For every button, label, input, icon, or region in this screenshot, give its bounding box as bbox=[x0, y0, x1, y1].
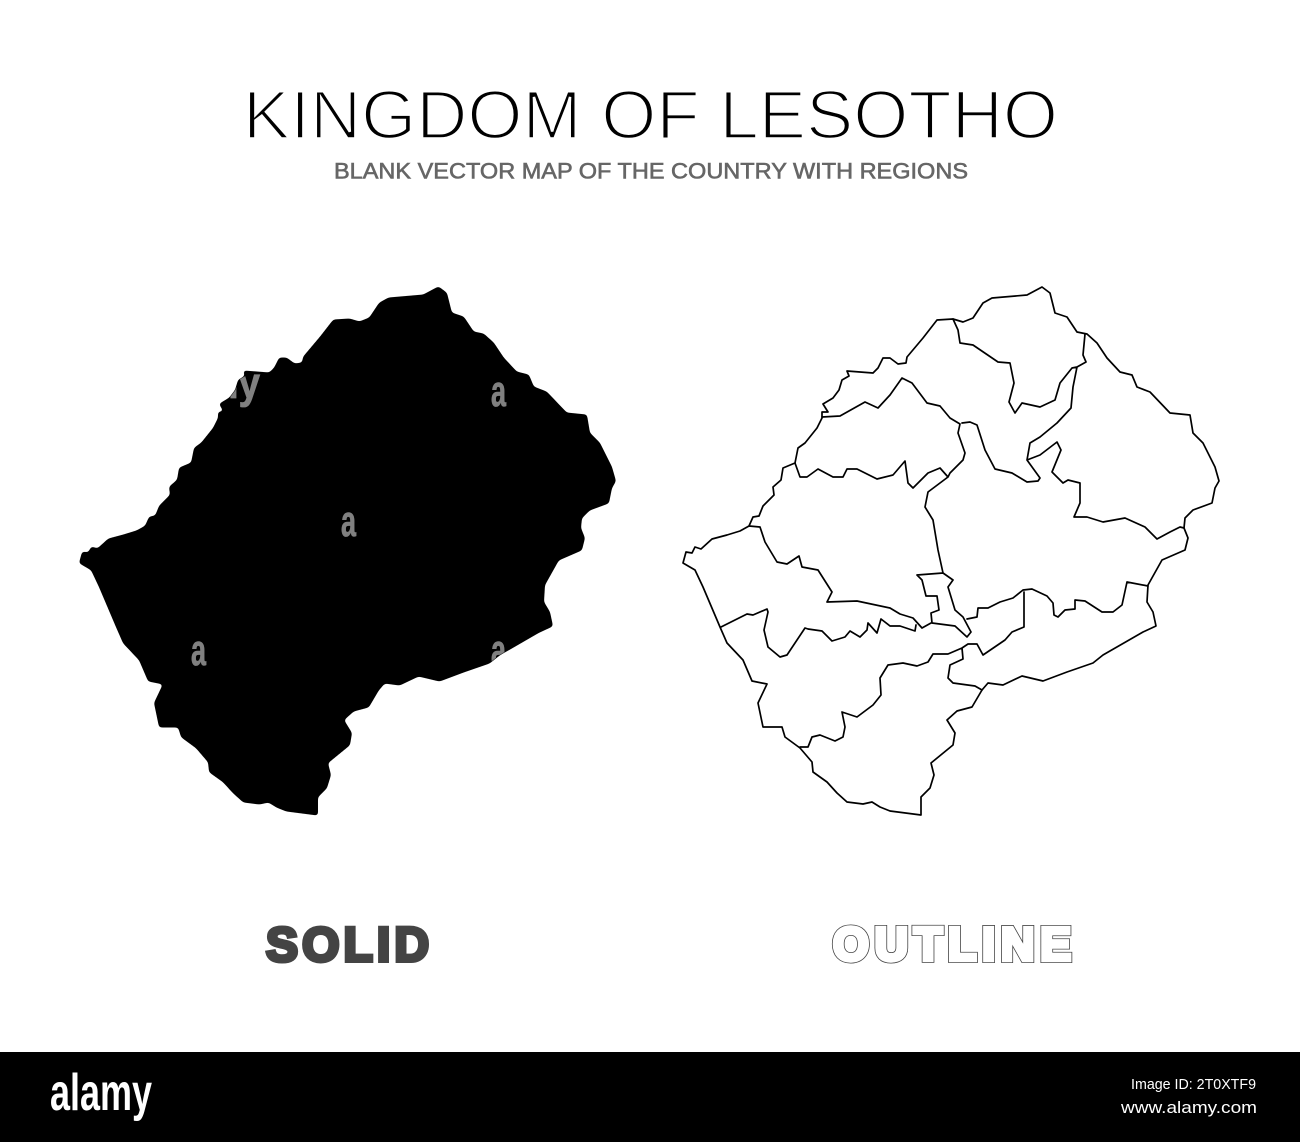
label: outline: OUTLINE bbox=[833, 918, 1071, 970]
watermark letters over solid map: a bbox=[341, 497, 356, 546]
watermark letters over solid map: a bbox=[491, 367, 506, 416]
title: KINGDOM OF LESOTHO bbox=[243, 76, 1058, 154]
watermark letters over solid map: a bbox=[491, 626, 506, 675]
label: solid: SOLID bbox=[266, 919, 429, 972]
footer bar bbox=[0, 1052, 1300, 1142]
website: www.alamy.com bbox=[1120, 1098, 1257, 1117]
subtitle: BLANK VECTOR MAP OF THE COUNTRY WITH REGIONS bbox=[334, 158, 968, 184]
region borders bbox=[721, 319, 1184, 747]
watermark letters over solid map: my bbox=[204, 359, 260, 408]
watermark letters over solid map bbox=[191, 359, 506, 675]
image id: Image ID: 2T0XTF9 bbox=[1131, 1076, 1256, 1093]
outline map of Lesotho with regions bbox=[683, 287, 1219, 815]
label: outline: OUTLINE bbox=[833, 918, 1071, 970]
country border bbox=[683, 287, 1219, 815]
watermark letters over solid map: a bbox=[191, 626, 206, 675]
solid map of Lesotho bbox=[80, 287, 616, 815]
footer logo: alamy bbox=[50, 1064, 152, 1122]
